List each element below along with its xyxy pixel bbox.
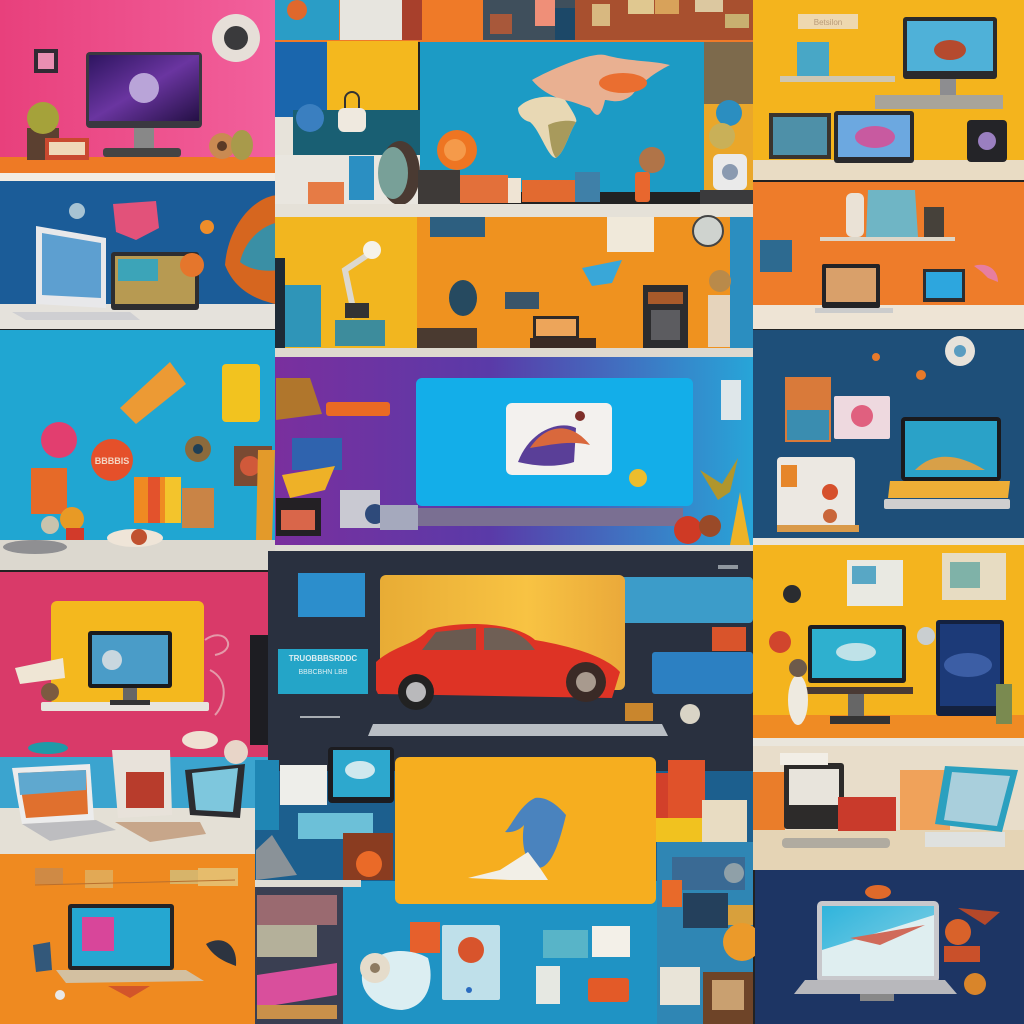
icon: orange items: [865, 885, 1000, 995]
panel: pink top-left monitor: [0, 0, 275, 181]
icon: yellow square: [222, 364, 260, 422]
panel: top strip: [275, 0, 753, 42]
panel: blue laptops: [0, 181, 280, 329]
icon: tablet: [111, 252, 204, 310]
panel: laptops on desk: [0, 731, 275, 854]
map board: [420, 42, 704, 192]
icon: blue tablet: [923, 269, 965, 302]
icon: cylinder gadget: [700, 100, 753, 206]
icon: laptop: [815, 264, 893, 313]
icon: shelf boxes: [308, 156, 600, 206]
label: small sign: [798, 14, 858, 29]
icon: small monitor: [328, 747, 394, 803]
panel: yellow top-right: [753, 0, 1024, 180]
panel: light desk right: [753, 746, 1024, 870]
icon: padlock: [338, 92, 366, 132]
icon: orange swoosh: [225, 195, 280, 305]
icon: blue bird figure: [468, 798, 566, 880]
icon: monitor: [803, 625, 913, 724]
icon: webcam: [212, 14, 260, 62]
panel: navy right: [753, 330, 1024, 545]
panel: orange and yellow wall: [275, 216, 753, 357]
icon: big screen: [416, 378, 693, 506]
icon: red stack: [838, 797, 896, 831]
icon: keyboard: [368, 724, 668, 736]
icon: tag: [721, 380, 741, 420]
icon: birds: [33, 940, 236, 1000]
icon: laptop left: [12, 764, 116, 841]
icon: orange tag: [120, 362, 186, 424]
icon: printer: [780, 753, 844, 829]
panel: purple wall with blue screen: [275, 357, 753, 551]
icon: laptop: [56, 904, 204, 983]
icon: orange disc speaker: [378, 130, 477, 205]
panel: dark car section: [268, 551, 753, 771]
icon: monitor: [903, 17, 997, 95]
panel: pink monitor on yellow: [0, 572, 275, 758]
icon: camera: [185, 436, 272, 486]
icon: laptop right: [185, 764, 245, 818]
icon: laptop: [884, 417, 1010, 509]
icon: speaker box: [643, 285, 730, 351]
icon: posters: [785, 377, 890, 442]
icon: laptop: [12, 226, 140, 320]
icon: plant box: [27, 102, 89, 160]
label: banner: [278, 649, 368, 694]
icon: disc roll: [360, 951, 431, 1010]
panel: map section: [275, 41, 753, 217]
label: banner: BBBCBHN LBB: [298, 669, 348, 676]
icon: cards row: [410, 922, 630, 1004]
icon: note: [15, 658, 65, 684]
bottom blue: [343, 881, 657, 1024]
icon: stickers: [847, 553, 1006, 606]
icon: tablet tilt: [935, 766, 1018, 832]
icon: clocks: [693, 216, 731, 292]
icon: orange badge: BBBBIS: [95, 456, 129, 466]
label: banner: TRUOBBBSRDDC: [289, 654, 357, 663]
icon: white card bird: [506, 403, 612, 475]
icon: galaxy tablet: [936, 620, 1004, 716]
icon: monitor: [86, 52, 202, 157]
panel: yellow desk right: [753, 545, 1024, 746]
icon: wall signs: [430, 217, 654, 316]
icon: small frame: [34, 49, 58, 73]
icon: keyboard: [782, 832, 1005, 848]
icon: red car: [376, 624, 620, 710]
panel: orange right: [753, 182, 1024, 329]
icon: small items: [300, 565, 738, 724]
icon: laptop: [794, 901, 957, 1001]
icon: desk lamp: [335, 241, 385, 346]
yellow board: [380, 575, 625, 690]
icon: disc: [872, 336, 975, 380]
icon: world map: [518, 55, 670, 202]
icon: books: [134, 477, 214, 528]
icon: orange badge: [91, 439, 133, 481]
icon: fruit: [41, 507, 84, 540]
icon: figures: [769, 585, 1012, 725]
icon: pink sticker: [113, 201, 159, 240]
icon: shelf: [780, 76, 895, 82]
icon: small items: [28, 731, 248, 764]
icon: blue sticky: [298, 573, 365, 617]
icon: gadgets: [209, 130, 253, 160]
icon: desk items: [3, 529, 163, 554]
panel: orange bottom-left: [0, 854, 256, 1024]
icon: screen base: [418, 508, 683, 526]
panel: yellow card lower center: [255, 747, 761, 1024]
icon: printer camera: [340, 490, 418, 530]
icon: pink circle: [41, 422, 77, 458]
icon: blue box: [275, 258, 321, 348]
icon: string of cards: [35, 868, 238, 888]
label: small sign: Betsilon: [814, 18, 842, 27]
icon: flamingo: [974, 265, 998, 282]
panel: cyan shapes: [0, 330, 278, 570]
icon: orange note: [31, 468, 67, 514]
icon: red folders: [655, 760, 747, 842]
icon: poster white: [777, 457, 859, 532]
icon: monitor: [88, 631, 172, 705]
icon: left items: [276, 378, 390, 536]
icon: wall items: [760, 190, 944, 272]
icon: squiggle: [205, 635, 228, 715]
panel: navy bottom-right: [755, 870, 1024, 1024]
icon: laptop middle: [112, 750, 206, 842]
icon: fruit plant: [629, 458, 750, 545]
yellow card: [395, 757, 656, 904]
icon: tablet row: [769, 111, 1007, 163]
icon: small tablet: [417, 316, 596, 350]
icon: pumpkins: [343, 833, 393, 880]
shelf: [820, 237, 955, 241]
icon: yellow board: [51, 601, 204, 705]
